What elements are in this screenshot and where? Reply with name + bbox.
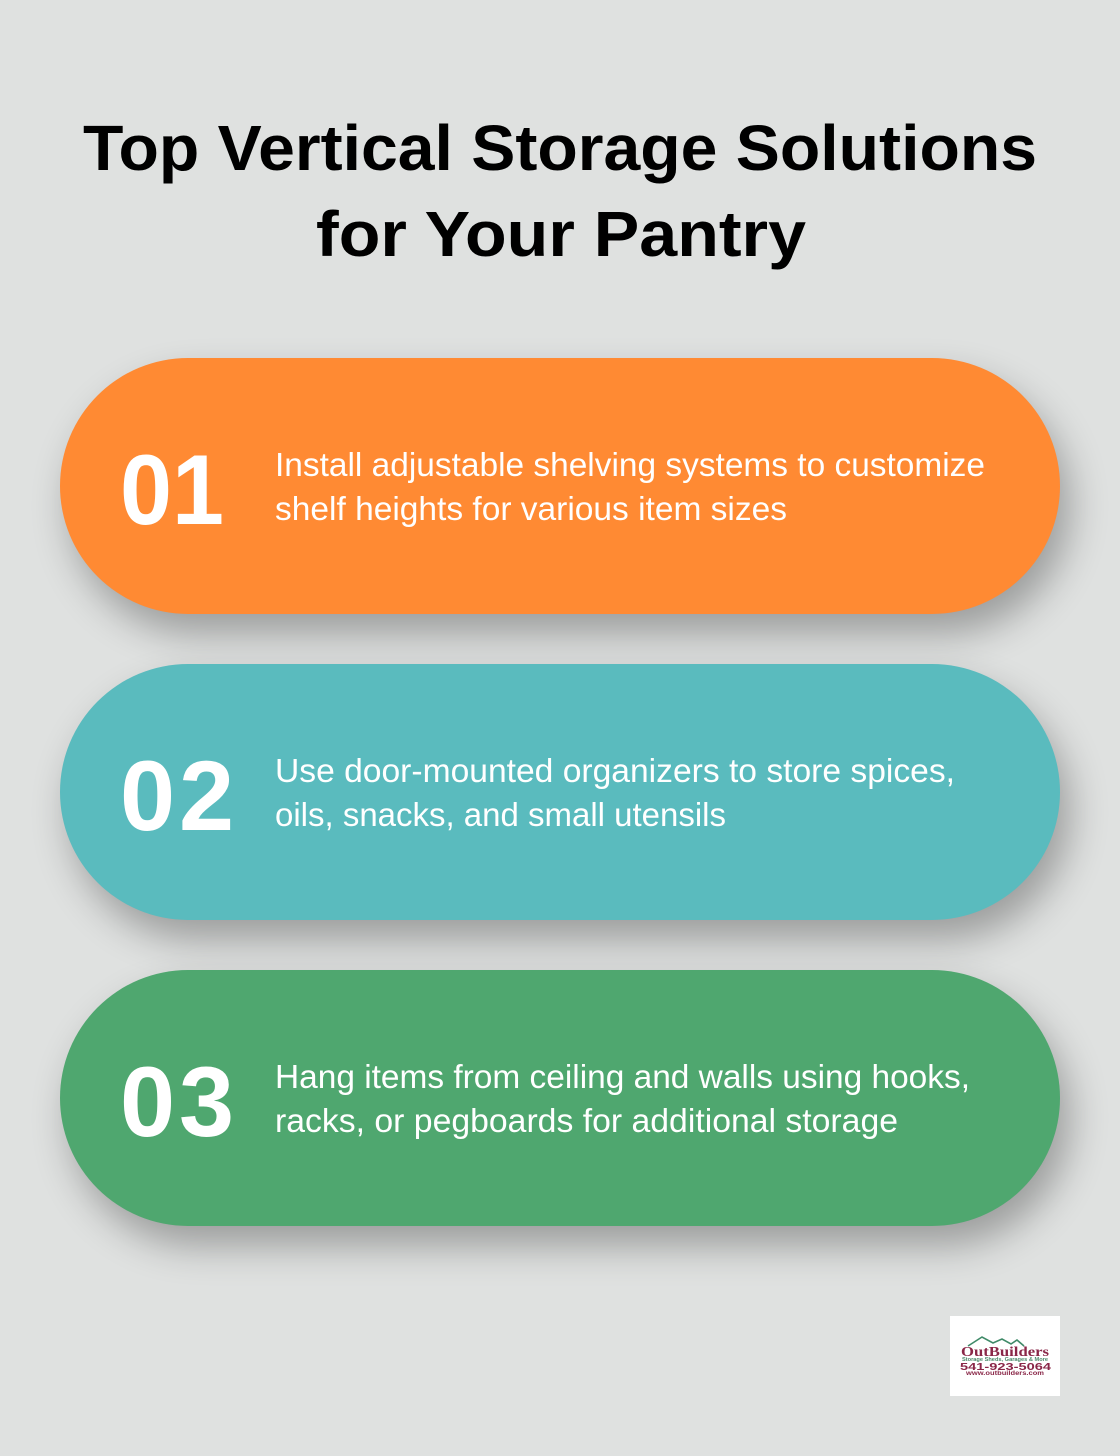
logo: OutBuilders: Storage Sheds, Garages & More [962, 1357, 1048, 1363]
step 3 text: racks, or pegboards for additional storage [275, 1102, 898, 1139]
panel: step 3 pill [60, 970, 1060, 1226]
title: for Your Pantry [316, 198, 806, 270]
title [83, 112, 1037, 270]
icon: roof lines [968, 1337, 1024, 1346]
logo: OutBuilders: OutBuilders [961, 1345, 1050, 1360]
step 3 text: Hang items from ceiling and walls using hooks, [275, 1058, 970, 1095]
logo: OutBuilders: 541-923-5064 [960, 1362, 1052, 1373]
step 2 text: Use door-mounted organizers to store spices, [275, 752, 955, 789]
step 2 number: 02 [120, 740, 234, 851]
step 1 text: shelf heights for various item sizes [275, 490, 787, 527]
title: Top Vertical Storage Solutions [83, 112, 1037, 184]
step 2 text [275, 752, 955, 833]
panel: step 2 pill [60, 664, 1060, 920]
step 1 number: 01 [120, 434, 224, 545]
logo: OutBuilders [950, 1316, 1060, 1396]
step 1 text [275, 446, 985, 527]
logo: OutBuilders: www.outbuilders.com [965, 1371, 1044, 1377]
step 3 text [275, 1058, 970, 1139]
step 2 text: oils, snacks, and small utensils [275, 796, 726, 833]
step 1 text: Install adjustable shelving systems to customize [275, 446, 985, 483]
panel: step 1 pill [60, 358, 1060, 614]
step 3 number: 03 [120, 1046, 234, 1157]
